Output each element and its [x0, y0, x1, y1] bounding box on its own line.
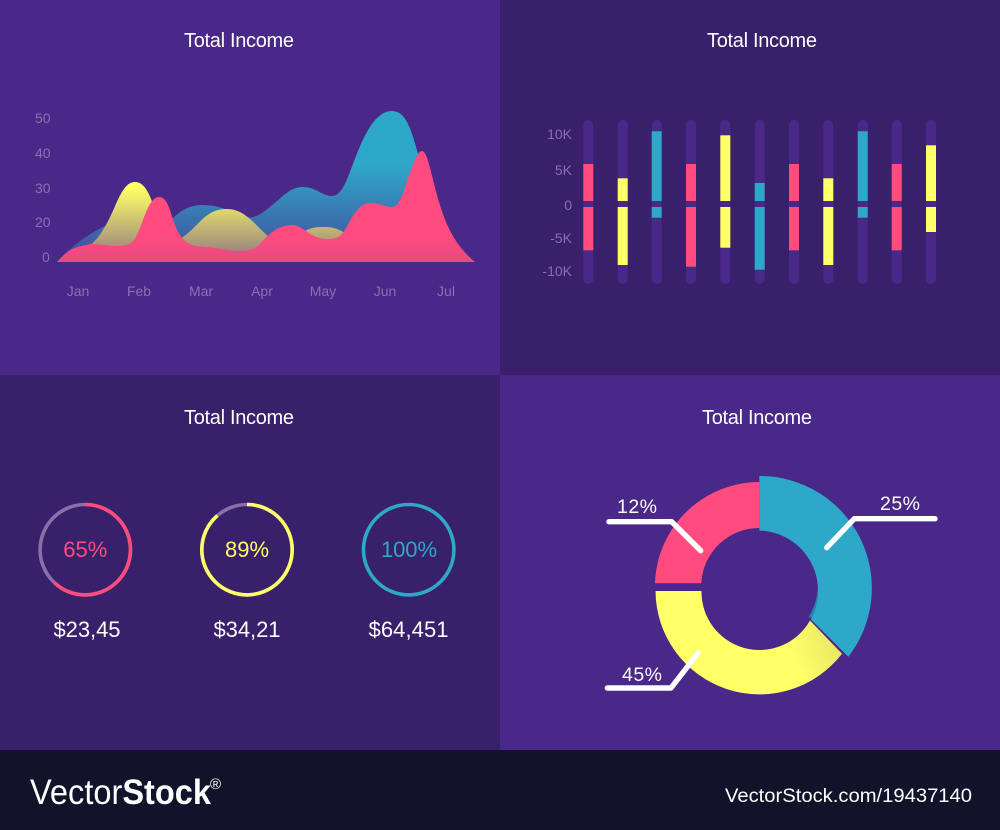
- x axis labels: Jan: [67, 283, 89, 299]
- label: 25%: 25%: [880, 493, 920, 515]
- bar axis labels: 0: [564, 197, 572, 213]
- ring: 65%: 65%: [63, 537, 107, 562]
- heading: donut chart: Total Income: [702, 407, 812, 429]
- pink bars: [583, 164, 902, 267]
- donut segment: teal: [759, 476, 872, 657]
- value: $64,451: $64,451: [368, 617, 448, 642]
- y axis labels: 0: [42, 249, 50, 265]
- leader line: 25%: [827, 519, 935, 548]
- label: 45%: 45%: [622, 664, 662, 686]
- label: 12%: 12%: [617, 496, 657, 518]
- logo: registered mark: ®: [210, 776, 221, 793]
- panel: donut chart: [500, 375, 1000, 750]
- ring: 89%: 89%: [225, 537, 269, 562]
- heading: area chart: Total Income: [184, 30, 294, 52]
- donut segment: pink: [655, 482, 759, 583]
- x axis labels: May: [310, 283, 336, 299]
- bar axis labels: 10K: [547, 126, 573, 142]
- value: $23,45: $23,45: [54, 617, 120, 642]
- heading: progress rings: Total Income: [184, 407, 294, 429]
- leader line: 12%: [609, 522, 701, 551]
- ring: 100%: 100%: [381, 537, 437, 562]
- x axis labels: Jun: [374, 283, 396, 299]
- donut segment: yellow: [656, 591, 842, 694]
- leader line: 45%: [607, 653, 698, 688]
- y axis labels: 30: [35, 180, 51, 196]
- footer bar: [0, 750, 1000, 830]
- x axis labels: Feb: [127, 283, 151, 299]
- panel: area chart: [0, 0, 500, 375]
- ring: 65%: [40, 504, 131, 595]
- yellow bars: [618, 135, 936, 265]
- ring: 100%: [364, 504, 454, 595]
- panel: progress rings: [0, 375, 500, 750]
- footer reference: VectorStock.com/19437140: [725, 786, 972, 807]
- bar axis labels: 5K: [555, 162, 573, 178]
- y axis labels: 40: [35, 145, 51, 161]
- donut segment: teal shadow: [759, 520, 830, 625]
- bar axis labels: -10K: [542, 263, 573, 279]
- x axis labels: Mar: [189, 283, 213, 299]
- bar axis labels: -5K: [550, 230, 573, 246]
- y axis labels: [35, 110, 51, 265]
- ring: 89%: [202, 504, 292, 595]
- area: pink series: [57, 151, 475, 262]
- teal bars: [652, 131, 868, 270]
- heading: diverging bars: Total Income: [707, 30, 817, 52]
- value: $34,21: $34,21: [214, 617, 280, 642]
- bar axis labels: [542, 126, 573, 279]
- x axis labels: [67, 283, 455, 299]
- logo: VectorStock: VectorStock: [30, 773, 211, 812]
- area: blue series: [57, 111, 475, 262]
- x axis labels: Apr: [251, 283, 273, 299]
- bar tracks: [583, 120, 936, 284]
- area: yellow series: [85, 182, 348, 262]
- panel: diverging bars: [500, 0, 1000, 375]
- y axis labels: 20: [35, 214, 51, 230]
- x axis labels: Jul: [437, 283, 455, 299]
- y axis labels: 50: [35, 110, 51, 126]
